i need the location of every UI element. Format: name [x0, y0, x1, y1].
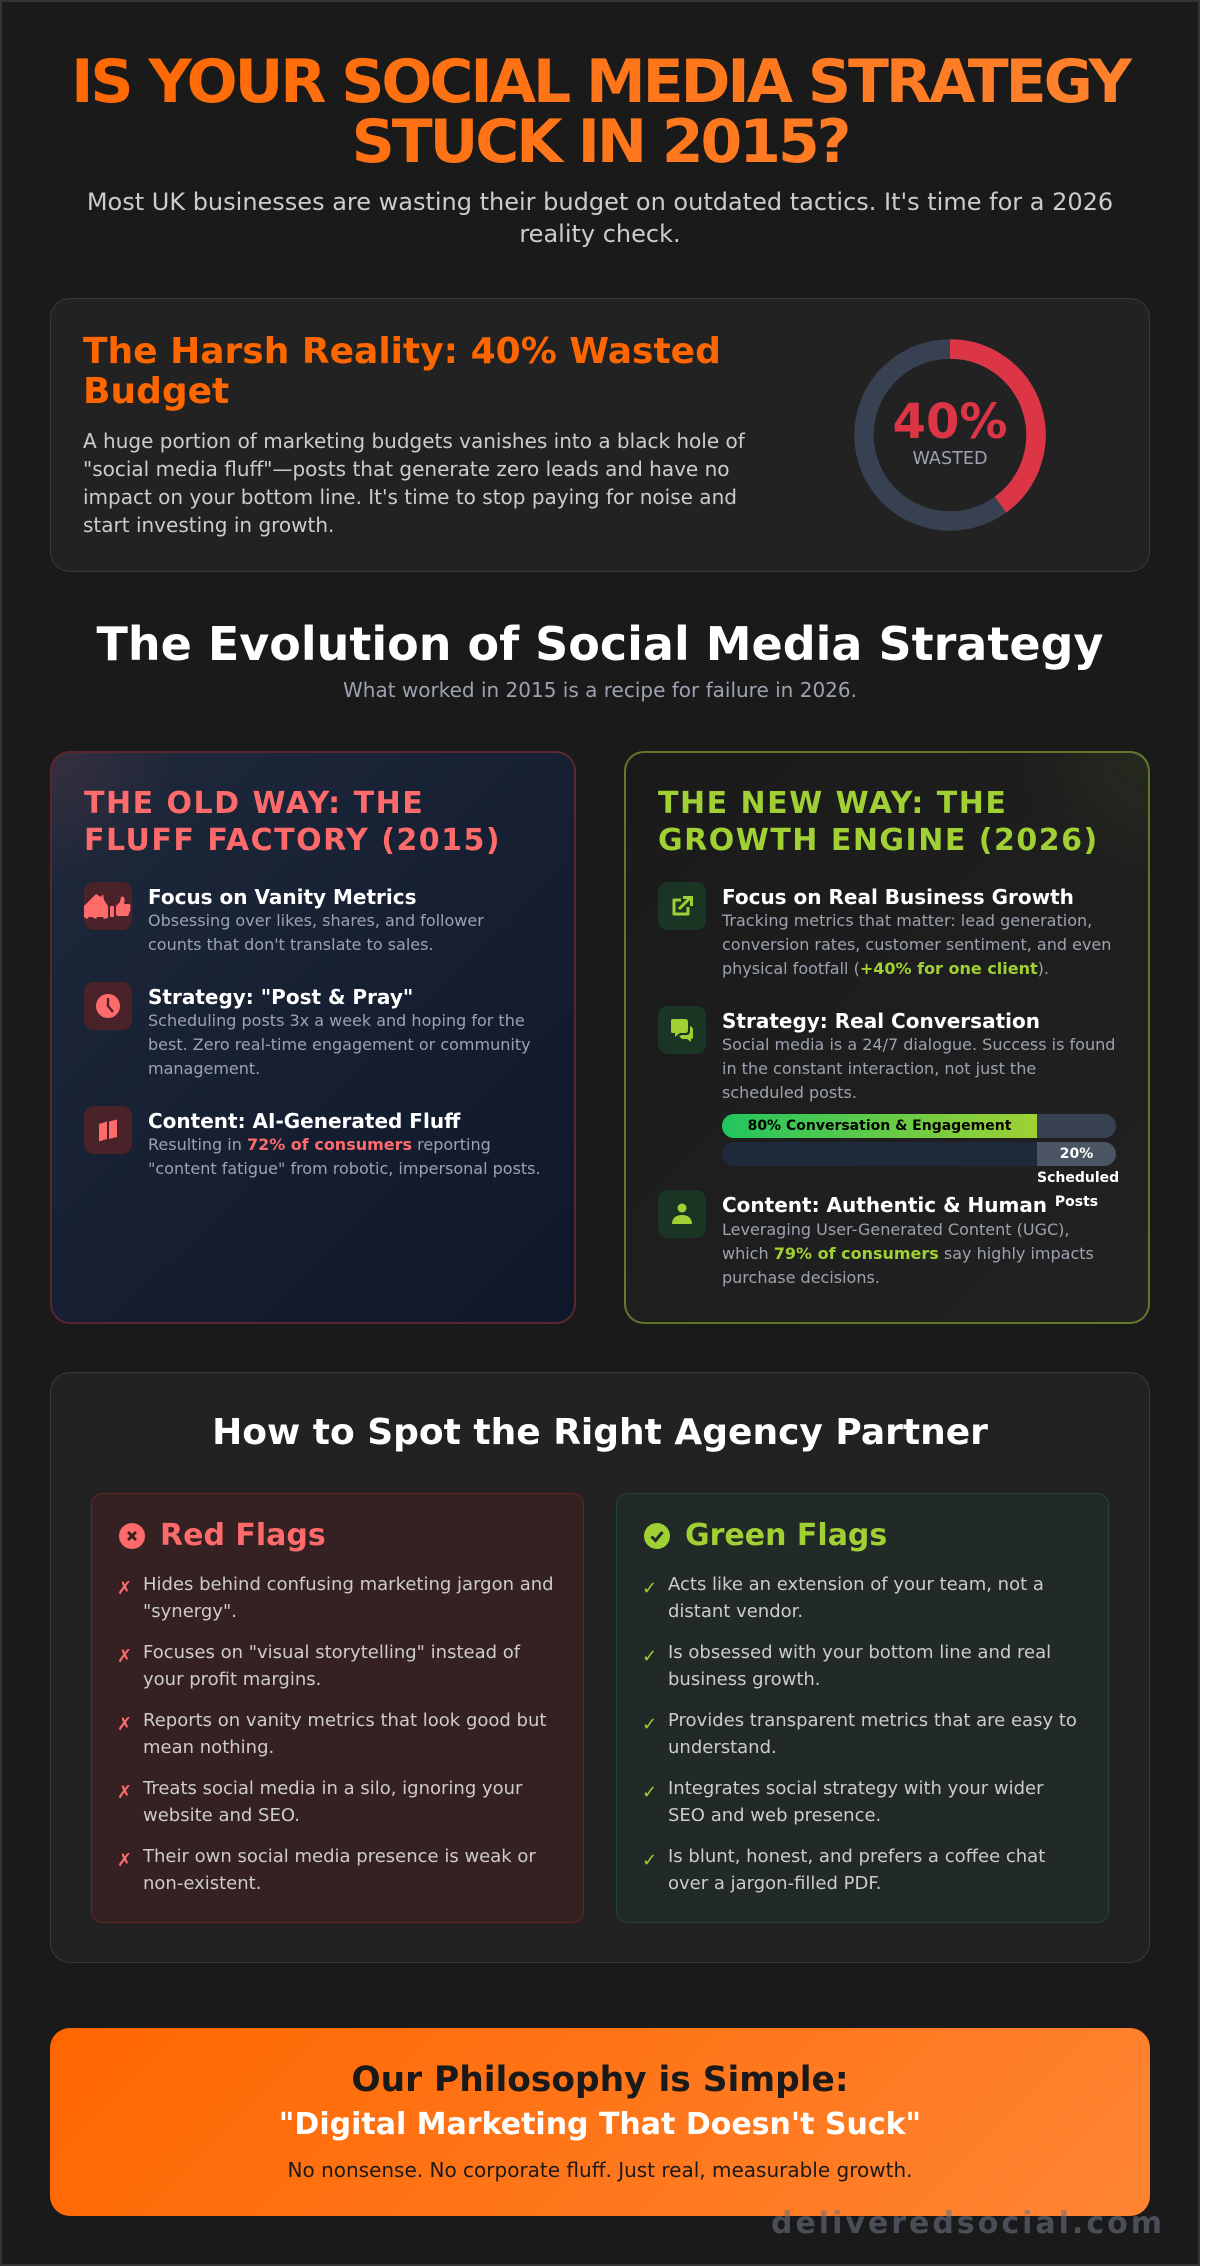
list: red flags: [117, 1574, 554, 1894]
list: red flags: website and SEO.: [143, 1805, 300, 1826]
list: red flags: your profit margins.: [143, 1669, 321, 1690]
item text: authentic and human: Leveraging User-Generated Content (UGC),: [722, 1220, 1070, 1239]
item text: vanity metrics: counts that don't translate to sales.: [148, 935, 434, 954]
item text: real conversation: Social media is a 24/7 dialogue. Success is found: [722, 1035, 1115, 1054]
heading: new way: THE NEW WAY: THE: [658, 786, 1007, 821]
title: IS YOUR SOCIAL MEDIA STRATEGY: [71, 47, 1129, 117]
icon: cross circle: [119, 1523, 145, 1549]
chart: 40 percent donut: WASTED: [912, 449, 988, 469]
list: red flags: Focuses on "visual storytelling" instead of: [143, 1642, 520, 1663]
title: [2, 52, 1198, 172]
item text: AI fluff: "content fatigue" from robotic, impersonal posts.: [148, 1159, 541, 1178]
list: green flags: ✓: [642, 1714, 657, 1735]
item text: real conversation: [722, 1035, 1115, 1102]
chart: 40 percent donut: 40%: [893, 394, 1007, 450]
item text: post and pray: [148, 1011, 531, 1078]
list: red flags: ✗: [117, 1782, 132, 1803]
list: red flags: "synergy".: [143, 1601, 237, 1622]
heading: old way: THE OLD WAY: THE: [84, 786, 424, 821]
callout: philosophy: [50, 2028, 1150, 2216]
list: green flags: business growth.: [668, 1669, 821, 1690]
item text: business growth: physical footfall (+40% for one client).: [722, 959, 1049, 978]
list: green flags: over a jargon-filled PDF.: [668, 1873, 882, 1894]
item text: vanity metrics: [148, 911, 484, 954]
list: green flags: Is blunt, honest, and prefers a coffee chat: [668, 1846, 1045, 1867]
text: harsh reality body: [83, 429, 746, 537]
item title: post and pray: Strategy: "Post & Pray": [148, 985, 413, 1009]
subtitle: reality check.: [519, 220, 681, 248]
item title: business growth: Focus on Real Business Growth: [722, 885, 1074, 909]
panel: green flags: [616, 1493, 1109, 1923]
heading: agency partner: How to Spot the Right Agency Partner: [212, 1412, 988, 1453]
item title: AI fluff: Content: AI-Generated Fluff: [148, 1109, 460, 1133]
text: harsh reality body: "social media fluff"—posts that generate zero leads and have no: [83, 457, 729, 481]
bar fill: conversation: [722, 1114, 1037, 1138]
item text: business growth: Tracking metrics that matter: lead generation,: [722, 911, 1092, 930]
heading: harsh reality: [83, 331, 721, 412]
item text: post and pray: management.: [148, 1059, 260, 1078]
item text: authentic and human: which 79% of consumers say highly impacts: [722, 1244, 1094, 1263]
heading: green flags: Green Flags: [685, 1518, 887, 1553]
item text: post and pray: best. Zero real-time engagement or community: [148, 1035, 531, 1054]
panel: new way: Posts: [1055, 1194, 1098, 1210]
list: green flags: ✓: [642, 1782, 657, 1803]
text: philosophy note: No nonsense. No corporate fluff. Just real, measurable growth.: [288, 2158, 912, 2182]
heading: evolution: The Evolution of Social Media Strategy: [97, 617, 1103, 671]
bar fill: scheduled: [1037, 1142, 1116, 1166]
panel: old way: [50, 751, 576, 1324]
text: harsh reality body: impact on your bottom line. It's time to stop paying for noise and: [83, 485, 737, 509]
list: green flags: Integrates social strategy with your wider: [668, 1778, 1044, 1799]
list: green flags: ✓: [642, 1646, 657, 1667]
item text: vanity metrics: Obsessing over likes, shares, and follower: [148, 911, 484, 930]
list: green flags: ✓: [642, 1850, 657, 1871]
list: red flags: Reports on vanity metrics that look good but: [143, 1710, 546, 1731]
panel: agency partner: [50, 1372, 1150, 1963]
icon: check circle: [644, 1523, 670, 1549]
icon: map: [84, 1106, 132, 1154]
bar fill: scheduled: 20%: [1060, 1146, 1093, 1162]
item title: authentic and human: Content: Authentic & Human: [722, 1193, 1047, 1217]
item title: real conversation: Strategy: Real Conversation: [722, 1009, 1040, 1033]
item text: authentic and human: [722, 1220, 1094, 1287]
list: red flags: Treats social media in a silo, ignoring your: [143, 1778, 522, 1799]
list: red flags: ✗: [117, 1578, 132, 1599]
panel: red flags: [91, 1493, 584, 1923]
panel: harsh reality: [50, 298, 1150, 572]
item title: vanity metrics: Focus on Vanity Metrics: [148, 885, 417, 909]
list: red flags: ✗: [117, 1646, 132, 1667]
chart: 20 percent bar: [722, 1142, 1116, 1166]
heading: old way: [84, 786, 501, 858]
heading: harsh reality: Budget: [83, 371, 229, 412]
item text: business growth: conversion rates, customer sentiment, and even: [722, 935, 1111, 954]
list: green flags: Acts like an extension of your team, not a: [668, 1574, 1044, 1595]
title: STUCK IN 2015?: [352, 107, 848, 177]
heading: harsh reality: The Harsh Reality: 40% Wasted: [83, 331, 721, 372]
heading: red flags: Red Flags: [160, 1518, 326, 1553]
item text: business growth: [722, 911, 1111, 978]
heading: new way: [658, 786, 1099, 858]
item text: real conversation: scheduled posts.: [722, 1083, 857, 1102]
list: green flags: ✓: [642, 1578, 657, 1599]
chart: 40 percent donut: [854, 339, 1046, 531]
heading: old way: FLUFF FACTORY (2015): [84, 822, 501, 858]
icon: chat: [658, 1006, 706, 1054]
icon: person: [658, 1190, 706, 1238]
list: green flags: understand.: [668, 1737, 777, 1758]
icon: house and thumb: [84, 882, 132, 930]
list: red flags: ✗: [117, 1850, 132, 1871]
item text: real conversation: in the constant interaction, not just the: [722, 1059, 1036, 1078]
item text: authentic and human: purchase decisions.: [722, 1268, 880, 1287]
bar fill: conversation: 80% Conversation & Engagement: [748, 1118, 1011, 1134]
list: green flags: Provides transparent metrics that are easy to: [668, 1710, 1077, 1731]
text: evolution subtitle: What worked in 2015 is a recipe for failure in 2026.: [343, 678, 857, 702]
list: green flags: Is obsessed with your bottom line and real: [668, 1642, 1051, 1663]
subtitle: [87, 188, 1113, 248]
chart: 80 percent bar: [722, 1114, 1116, 1138]
list: red flags: non-existent.: [143, 1873, 261, 1894]
heading: philosophy: Our Philosophy is Simple:: [351, 2060, 849, 2100]
item text: AI fluff: [148, 1135, 541, 1178]
watermark: deliveredsocial.com: [771, 2206, 1165, 2241]
text: harsh reality body: start investing in growth.: [83, 513, 334, 537]
list: red flags: Hides behind confusing marketing jargon and: [143, 1574, 554, 1595]
text: slogan: "Digital Marketing That Doesn't Suck": [279, 2107, 921, 2142]
list: red flags: ✗: [117, 1714, 132, 1735]
icon: clock: [84, 982, 132, 1030]
item text: post and pray: Scheduling posts 3x a week and hoping for the: [148, 1011, 525, 1030]
list: green flags: distant vendor.: [668, 1601, 803, 1622]
heading: new way: GROWTH ENGINE (2026): [658, 822, 1099, 858]
subtitle: Most UK businesses are wasting their budget on outdated tactics. It's time for a 2026: [87, 188, 1113, 216]
icon: external link: [658, 882, 706, 930]
panel: new way: Scheduled: [1037, 1170, 1119, 1186]
item text: AI fluff: Resulting in 72% of consumers reporting: [148, 1135, 491, 1154]
panel: new way: [624, 751, 1150, 1324]
list: red flags: Their own social media presence is weak or: [143, 1846, 536, 1867]
list: green flags: SEO and web presence.: [668, 1805, 881, 1826]
text: harsh reality body: A huge portion of marketing budgets vanishes into a black hole of: [83, 429, 745, 453]
list: red flags: mean nothing.: [143, 1737, 274, 1758]
list: green flags: [642, 1574, 1077, 1894]
